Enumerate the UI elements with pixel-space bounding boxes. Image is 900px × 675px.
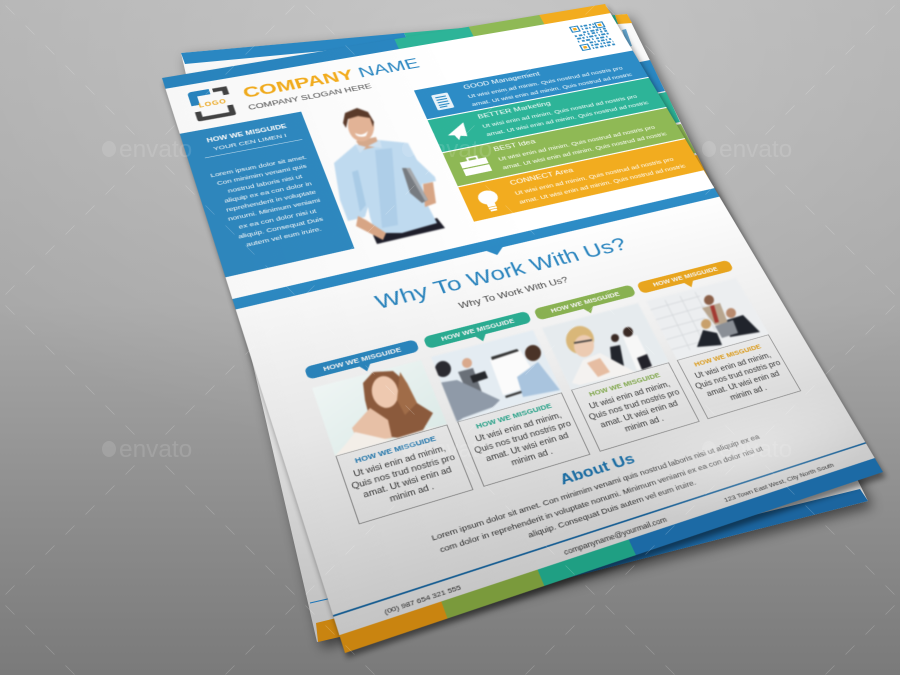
card text 4: minim ad . [729, 384, 769, 402]
feature bar: best idea [443, 108, 685, 186]
panel body text: nostrud laboris nisi ut [227, 173, 303, 194]
about heading: About Us [557, 451, 638, 488]
icon: light bulb [477, 190, 498, 212]
text: amat. Ut wisi enin ad minim. Quis nostrud ad nostric [471, 72, 633, 107]
speech bubble 2: HOW WE MISGUIDE [440, 317, 516, 342]
speech bubble 3 [533, 284, 636, 320]
about text: aliquip. Consequat Duis autem vel eum iruire. [527, 478, 698, 540]
panel heading: HOW WE MISGUIDE [206, 123, 288, 144]
panel body text: aliquip. Consequat Duis [237, 216, 324, 240]
phone: (00) 987 654 321 555 [383, 583, 462, 616]
photo: thoughtful businesswoman [542, 303, 669, 390]
card text 4: Quis nos trud nostris pro [694, 359, 782, 391]
title: GOOD Management [462, 71, 541, 91]
card text 4 [677, 334, 801, 419]
email: companyname@yourmail.com [562, 515, 668, 557]
card text 3: Quis nos trud nostris pro [588, 389, 681, 422]
photo: office presentation [431, 330, 562, 422]
bottom colour stripe [339, 458, 883, 653]
card text 1: amat. Ut wisi enin ad [362, 466, 453, 500]
speech bubble 4 [636, 260, 734, 294]
card text 4: Ut wisi enin ad minim, [694, 352, 773, 380]
feature bar: connect area [458, 139, 704, 222]
panel: left intro [180, 112, 354, 277]
card text 1: Ut wisi enin ad minim, [353, 445, 447, 479]
subheading: Why To Work With Us? [457, 274, 570, 311]
text: amat. Ut wisi enin ad minim. Quis nostrud ad nostric [518, 163, 687, 205]
company name: COMPANY NAME [240, 55, 422, 101]
photo: smiling woman [314, 370, 446, 456]
envato watermarks: envato [119, 136, 192, 163]
about text: Lorem ipsum dolor sit amet. Con minimim venami quis nostrud laboris nisi ut aliquip ex ea [430, 433, 761, 543]
card text 4: amat. Ut wisi enin ad [705, 370, 781, 398]
panel subheading: YOUR CEN LIMEN I [212, 133, 288, 152]
text: Ut wisi enin ad minim. Quis nostrud ad nostris pro [514, 156, 675, 196]
card text 3: HOW WE MISGUIDE [588, 371, 661, 398]
card text 2: minim ad . [510, 448, 554, 468]
speech bubble 2 [423, 311, 532, 349]
card text 2: Ut wisi enin ad minim, [474, 412, 563, 444]
panel body text: Con minimim venami quis [216, 163, 307, 187]
panel body text: Lorem ipsum dolor sit amet. [210, 154, 308, 179]
icon: document [431, 92, 454, 110]
heading: Why To Work With Us? [372, 234, 630, 314]
speech bubble 3: HOW WE MISGUIDE [549, 290, 621, 314]
card text 2: amat. Ut wisi enin ad [485, 432, 570, 464]
card text 1 [335, 424, 473, 524]
envato watermarks: envato [419, 436, 492, 463]
speech bubble 1: HOW WE MISGUIDE [322, 346, 402, 373]
text: amat. Ut wisi enin ad minim. Quis nostrud ad nostric [501, 131, 668, 171]
photos layer [314, 107, 768, 456]
card text 3 [571, 362, 700, 452]
card text 3: amat. Ut wisi enin ad [599, 400, 680, 430]
about text: com dolor in reprehenderit in voluptate nonumi. Minimum veniami ex ea con dolor nisi ut [438, 444, 764, 555]
text: amat. Ut wisi enin ad minim. Quis nostrud ad nostric [485, 100, 650, 138]
card text 2: HOW WE MISGUIDE [475, 402, 553, 430]
text: Ut wisi enin ad minim. Quis nostrud ad nostris pro [497, 124, 656, 162]
photo: man with laptop [334, 108, 445, 244]
card text 4: HOW WE MISGUIDE [693, 343, 762, 368]
logo [187, 86, 237, 122]
card text 3: minim ad . [623, 415, 665, 434]
icon: briefcase [460, 155, 492, 176]
card text 1: Quis nos trud nostris pro [351, 453, 456, 491]
top colour stripe [162, 4, 610, 89]
panel body text: autem vel eum iruire. [245, 226, 322, 248]
company slogan: COMPANY SLOGAN HERE [247, 82, 373, 111]
text: Ut wisi enim ad minim. Quis nostrud ad nostris pro [467, 65, 624, 99]
card text 2 [457, 392, 590, 487]
panel body text: ex ea con dolor nisi ut [238, 208, 317, 230]
card text 1: HOW WE MISGUIDE [354, 435, 437, 465]
panel body text: reprehenderit in voluptate [225, 189, 317, 213]
photo: business team [651, 292, 768, 360]
text: Ut wisi enin ad minim. Quis nostrud ad nostris pro [481, 93, 638, 129]
feature bar: good management [414, 51, 648, 119]
title: BEST Idea [492, 138, 537, 153]
envato watermarks: envato [719, 436, 792, 463]
envato watermarks: envato [719, 136, 792, 163]
envato watermarks: envato [119, 436, 192, 463]
speech bubble 4: HOW WE MISGUIDE [652, 266, 719, 288]
section band with notch [232, 188, 720, 310]
envato watermarks: envato [419, 136, 492, 163]
QR code [568, 21, 616, 51]
front flyer [162, 4, 883, 653]
panel body text [210, 154, 324, 248]
logo: LOGO [196, 98, 226, 108]
icon: paper plane [448, 122, 468, 140]
feature bar: better marketing [428, 78, 666, 152]
address: 123 Town East West, City North South [723, 461, 835, 504]
title: CONNECT Area [509, 167, 575, 187]
card text 2: Quis nos trud nostris pro [473, 420, 573, 456]
panel body text: aliquip ex ea con dolor in [223, 180, 312, 204]
card text 3: Ut wisi enin ad minim, [588, 381, 672, 411]
title: BETTER Marketing [477, 100, 552, 120]
card text 1: minim ad . [389, 483, 435, 504]
speech bubble 1 [304, 339, 420, 380]
panel body text: nonumi. Minimum veniami [227, 197, 321, 222]
